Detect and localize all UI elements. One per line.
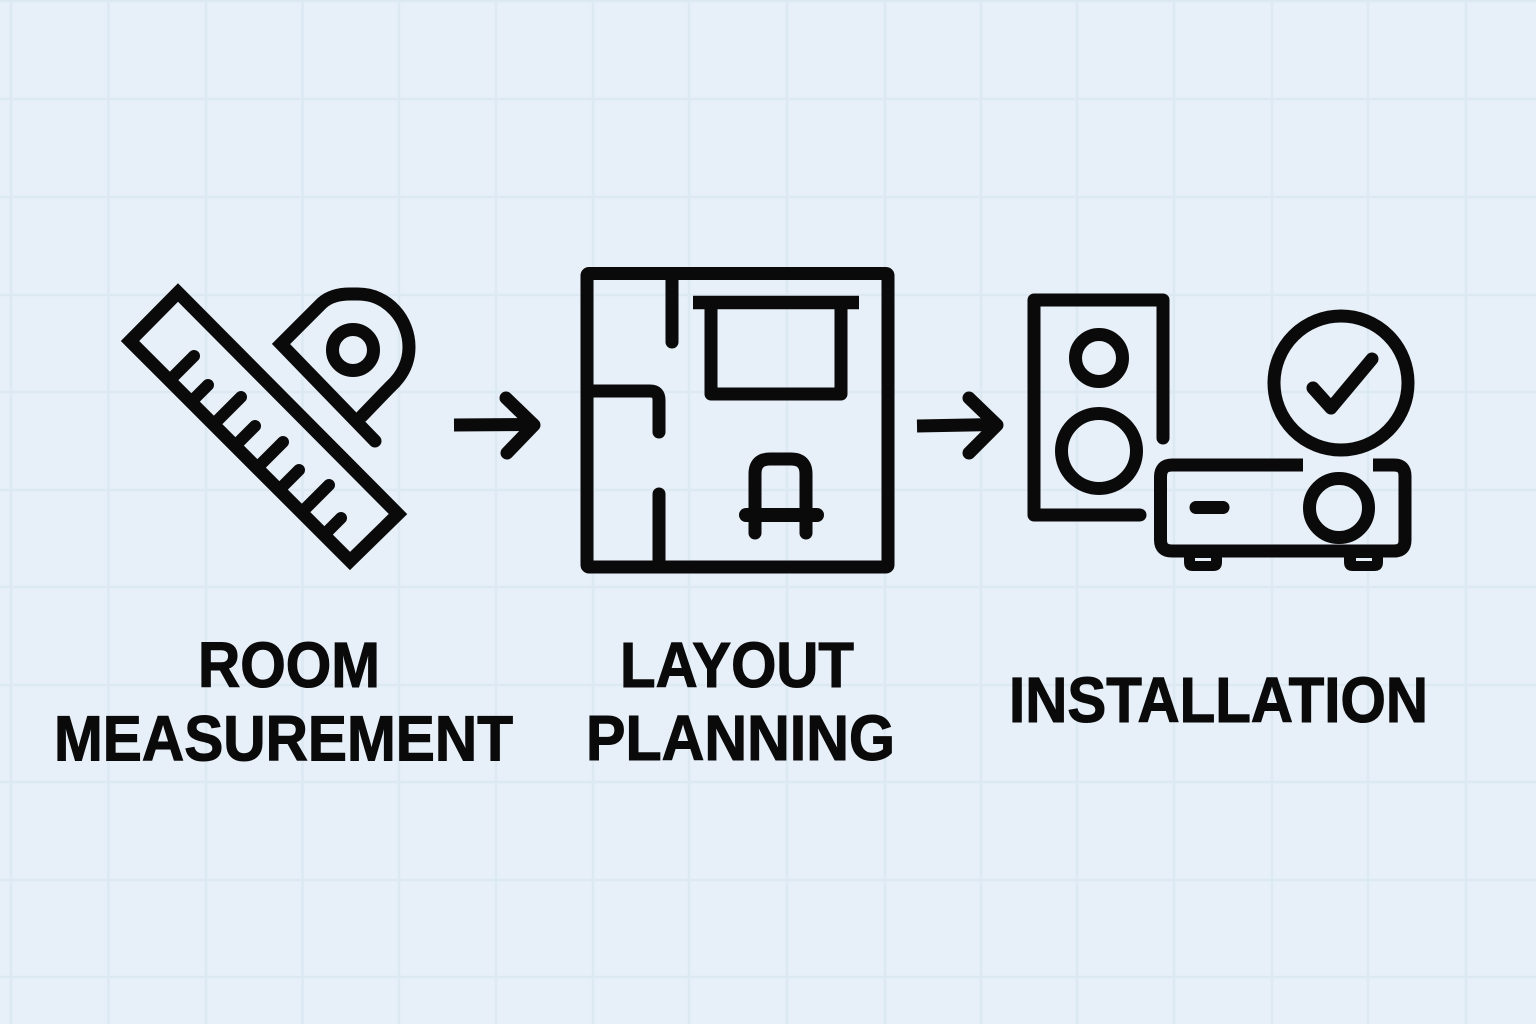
label: room measurement bbox=[54, 629, 513, 774]
arrow: measurement to layout bbox=[454, 398, 534, 453]
label: layout planning bbox=[586, 629, 895, 774]
label: layout planning: PLANNING bbox=[586, 702, 895, 774]
label: room measurement: MEASUREMENT bbox=[54, 702, 513, 774]
label: room measurement: ROOM bbox=[198, 629, 380, 701]
label: layout planning: LAYOUT bbox=[620, 629, 854, 701]
icon: tape measure bbox=[281, 294, 409, 441]
icon: projection screen bbox=[693, 302, 859, 394]
icon: floor plan bbox=[587, 274, 888, 567]
icon: chair bbox=[746, 459, 817, 533]
icon: check circle bbox=[1274, 316, 1408, 450]
icon: speaker bbox=[1034, 300, 1163, 515]
arrow: layout to installation bbox=[917, 398, 997, 453]
label: installation: INSTALLATION bbox=[1009, 664, 1428, 736]
icon: projector bbox=[1160, 465, 1405, 571]
icon: speaker, projector and checkmark bbox=[1034, 300, 1408, 571]
icon: ruler bbox=[130, 292, 398, 561]
icon: ruler and tape measure bbox=[130, 292, 409, 561]
